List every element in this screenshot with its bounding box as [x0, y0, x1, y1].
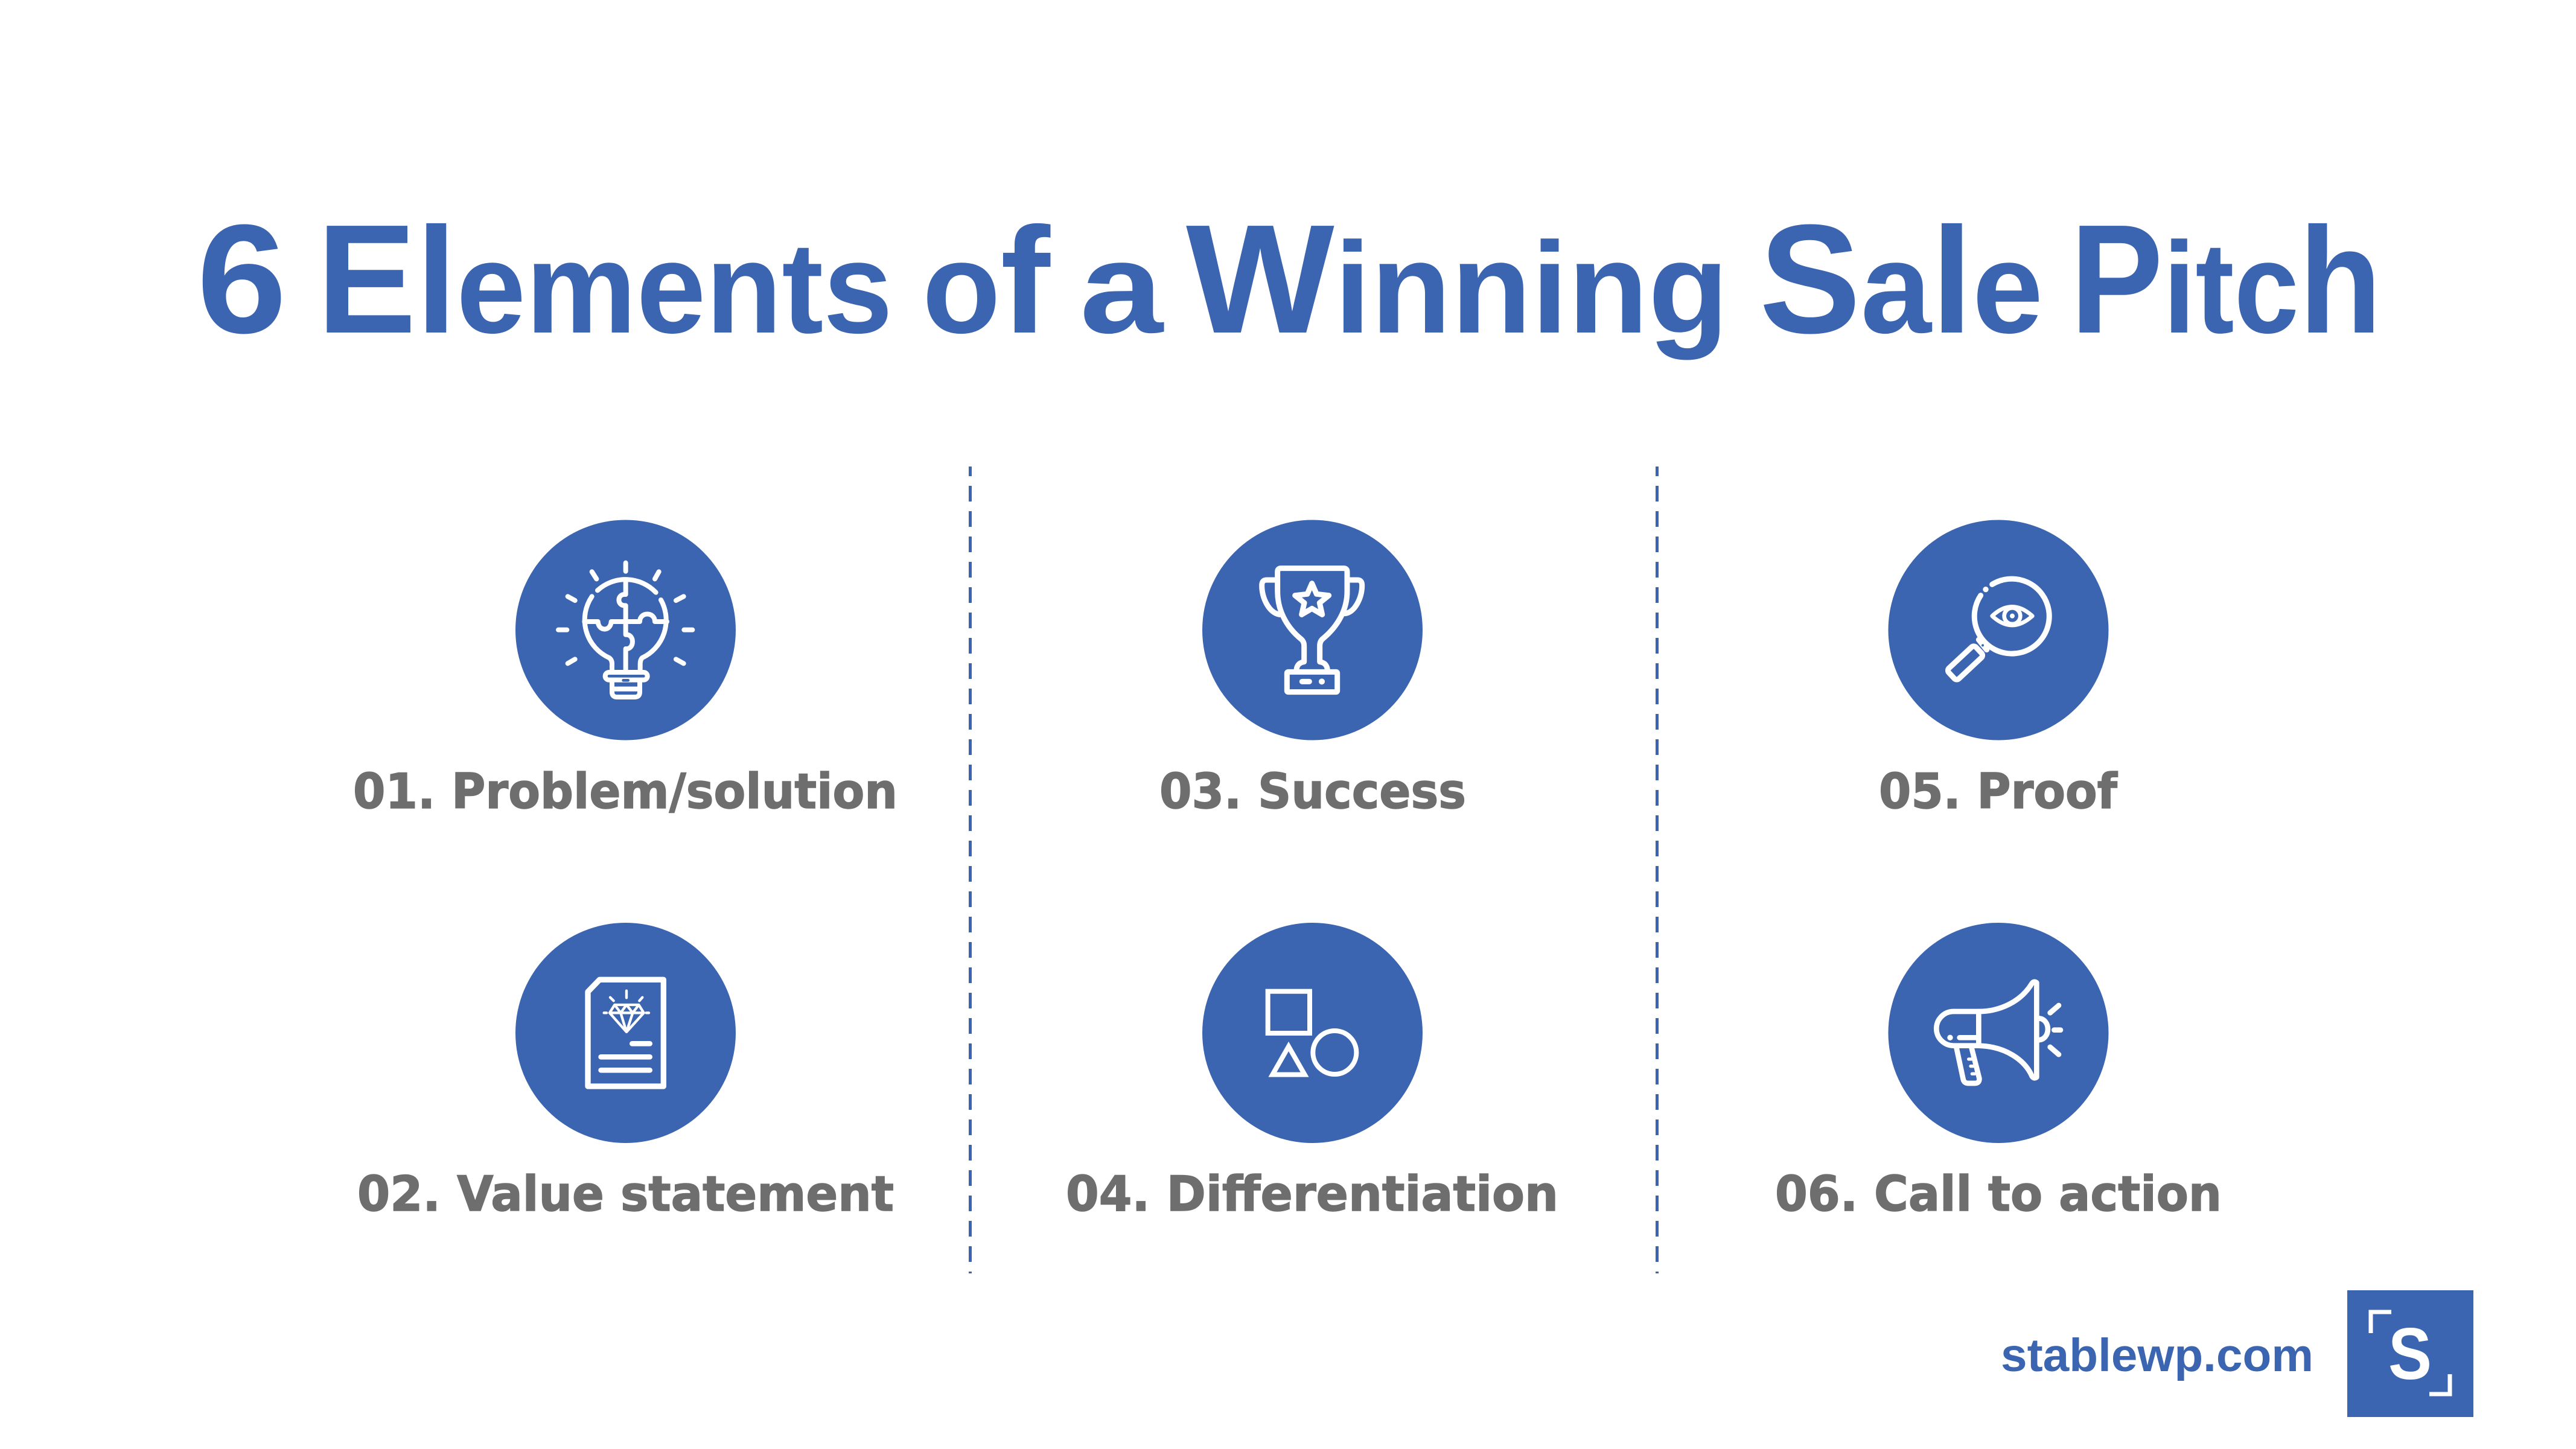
- icon: document with diamond: [588, 979, 663, 1086]
- panel: 05 proof: [1879, 520, 2118, 820]
- panel: 02 value statement: [357, 923, 894, 1222]
- title: Pitch: [2070, 193, 2382, 366]
- icon: square, triangle, circle: [1268, 992, 1356, 1075]
- title: [197, 193, 2382, 366]
- label: 06. Call to action: [1775, 1166, 2222, 1222]
- divider: right column: [1656, 467, 1659, 1273]
- website text: stablewp.com: [2001, 1330, 2313, 1381]
- label: 05. Proof: [1879, 763, 2118, 820]
- logo: [2347, 1290, 2473, 1417]
- label: 02. Value statement: [357, 1166, 894, 1222]
- title: of: [922, 196, 1051, 365]
- icon: trophy with star: [1262, 568, 1362, 692]
- title: 6: [197, 193, 287, 366]
- title: a: [1080, 215, 1164, 360]
- title: Elements: [317, 193, 893, 366]
- panel: 03 success: [1159, 520, 1466, 820]
- title: Sale: [1759, 193, 2043, 366]
- icon: magnifier with eye: [1946, 579, 2049, 681]
- panel: 04 differentiation: [1066, 923, 1558, 1222]
- logo: S: [2388, 1313, 2432, 1395]
- icon: puzzle light bulb: [558, 563, 692, 697]
- label: 04. Differentiation: [1066, 1166, 1558, 1222]
- icon: megaphone: [1936, 982, 2061, 1083]
- divider: left column: [969, 467, 972, 1273]
- panel: 06 call to action: [1775, 923, 2222, 1222]
- label: 03. Success: [1159, 763, 1466, 820]
- panel: 01 problem/solution: [353, 520, 897, 820]
- title: Winning: [1186, 193, 1729, 366]
- label: 01. Problem/solution: [353, 763, 897, 820]
